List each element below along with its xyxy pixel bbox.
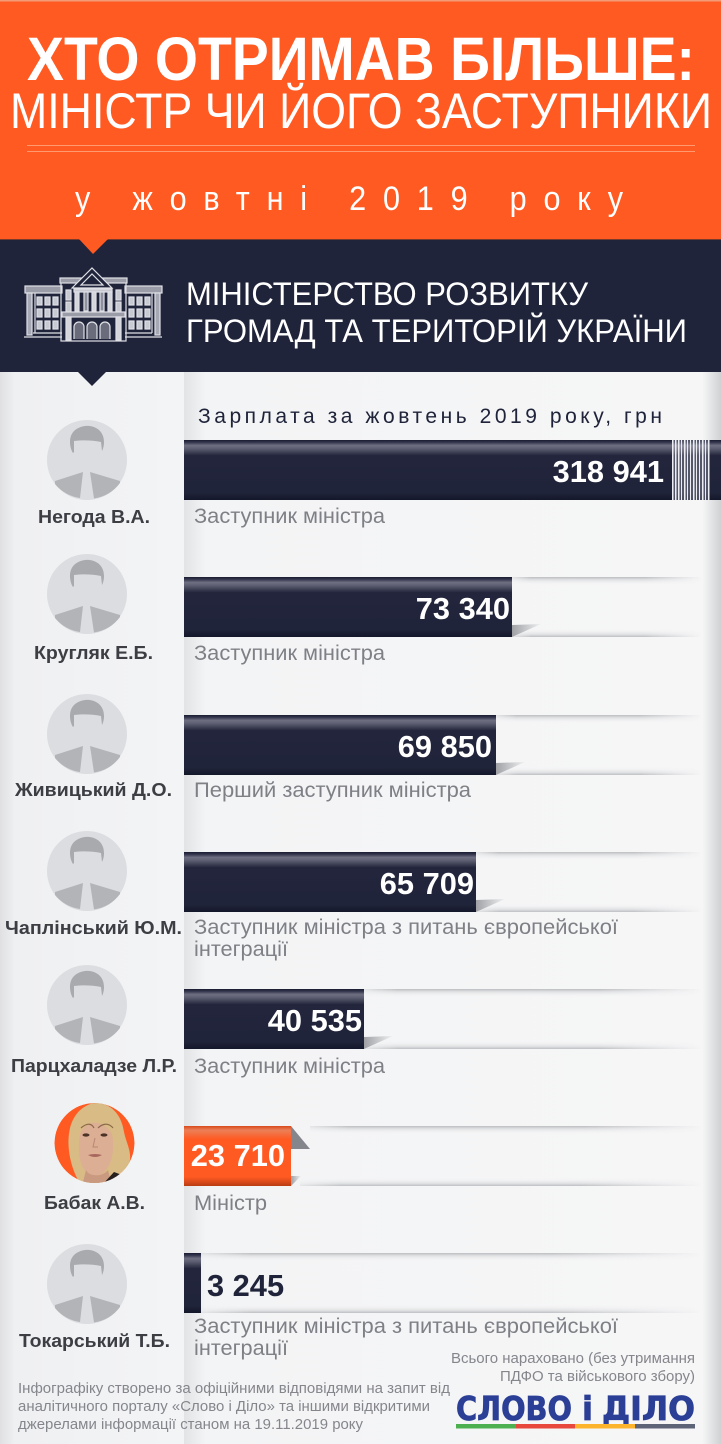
value: 69 850	[398, 729, 492, 764]
avatar	[47, 694, 127, 774]
page background	[0, 372, 721, 1444]
name: Кругляк Е.Б.	[34, 642, 153, 663]
logo: СЛОВО	[456, 1389, 572, 1428]
value: 23 710	[191, 1138, 285, 1173]
ribbon shading	[476, 852, 692, 857]
role: Заступник міністра з питань європейської	[194, 916, 618, 939]
logo	[456, 1389, 695, 1428]
source note: аналітичного порталу «Слово і Діло» та іншими відкритими	[18, 1399, 430, 1415]
row: Кругляк	[34, 554, 702, 665]
ribbon shading	[496, 715, 692, 720]
row: Чаплінський	[5, 831, 702, 961]
row: Токарський	[19, 1244, 702, 1360]
title	[10, 25, 712, 139]
name: Живицький Д.О.	[14, 779, 172, 800]
avatar	[47, 1244, 127, 1324]
photo	[54, 1103, 134, 1186]
role	[194, 916, 618, 961]
value: 3 245	[207, 1268, 284, 1303]
ministry name	[186, 276, 687, 349]
bar	[184, 852, 476, 912]
role: Перший заступник міністра	[194, 779, 471, 802]
bar	[184, 440, 721, 500]
row: Бабак (minister)	[44, 1103, 702, 1215]
role: Заступник міністра	[194, 505, 385, 528]
name: Негода В.А.	[38, 506, 150, 527]
name: Чаплінський Ю.М.	[5, 917, 182, 938]
row: Негода	[38, 420, 721, 528]
avatar	[47, 420, 127, 500]
source note	[18, 1381, 451, 1433]
salary note: Всього нараховано (без утримання	[451, 1350, 695, 1367]
role: Заступник міністра з питань європейської	[194, 1315, 618, 1338]
ribbon shading	[364, 989, 686, 994]
bar	[184, 1253, 201, 1313]
row: Парцхаладзе	[11, 965, 702, 1078]
source note: джерелами інформації станом на 19.11.2019 року	[18, 1417, 364, 1433]
avatar	[47, 965, 127, 1045]
ribbon shading	[201, 1253, 680, 1258]
role: Заступник міністра	[194, 642, 385, 665]
name: Токарський Т.Б.	[19, 1330, 170, 1351]
role: інтеграції	[194, 938, 288, 961]
bar	[184, 989, 364, 1049]
chart heading: Зарплата за жовтень 2019 року, грн	[198, 405, 662, 428]
role	[194, 1315, 618, 1360]
ministry name: ГРОМАД ТА ТЕРИТОРІЙ УКРАЇНИ	[186, 313, 687, 349]
ribbon shading	[512, 577, 694, 582]
role: Заступник міністра	[194, 1055, 385, 1078]
header panel	[0, 0, 721, 239]
bar	[184, 1126, 291, 1186]
row: Живицький	[14, 694, 702, 802]
name: Бабак А.В.	[44, 1192, 145, 1213]
bar	[184, 577, 512, 637]
bar	[184, 715, 496, 775]
ministry panel	[0, 239, 721, 386]
icon: ministry building	[24, 268, 162, 341]
subtitle: у жовтні 2019 року	[75, 180, 624, 217]
logo: і	[582, 1389, 593, 1428]
source note: Інфографіку створено за офіційними відповідями на запит від	[18, 1381, 451, 1397]
ribbon shading	[310, 1126, 684, 1131]
logo: ДІЛО	[602, 1389, 695, 1428]
value: 40 535	[268, 1003, 362, 1038]
avatar	[47, 831, 127, 911]
avatar	[47, 554, 127, 634]
ministry name: МІНІСТЕРСТВО РОЗВИТКУ	[186, 276, 589, 312]
value: 65 709	[380, 866, 474, 901]
value: 318 941	[553, 454, 664, 489]
stripes	[672, 440, 710, 500]
salary note: ПДФО та військового збору)	[500, 1368, 695, 1385]
role: інтеграції	[194, 1337, 288, 1360]
name: Парцхаладзе Л.Р.	[11, 1055, 177, 1076]
value: 73 340	[416, 591, 510, 626]
role: Міністр	[194, 1192, 267, 1215]
salary note	[451, 1350, 695, 1385]
